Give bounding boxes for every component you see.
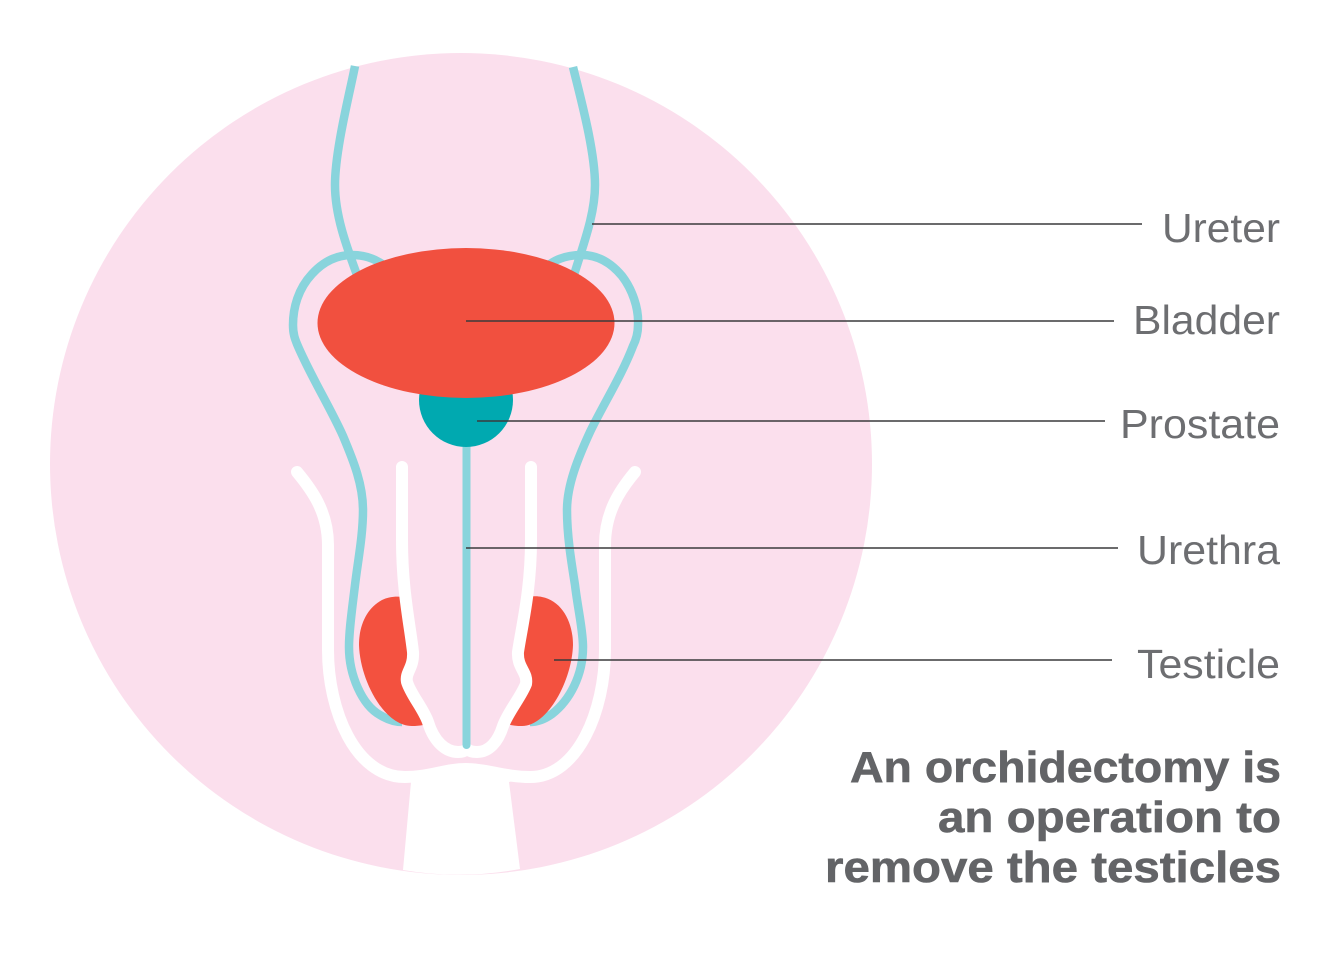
white inner lines	[402, 467, 531, 752]
ureters	[335, 66, 595, 275]
white lower body opening	[403, 764, 530, 875]
testicle right	[502, 596, 573, 726]
pink background circle	[50, 53, 872, 875]
caption: remove the testicles	[825, 843, 1281, 892]
labels: Urethra	[1137, 527, 1280, 573]
caption	[825, 743, 1281, 892]
labels: Testicle	[1137, 641, 1280, 687]
caption: an operation to	[938, 793, 1281, 842]
prostate	[419, 353, 513, 447]
urethra	[462, 440, 470, 745]
labels: Bladder	[1133, 297, 1280, 343]
testicle left	[359, 597, 432, 726]
labels: Ureter	[1162, 205, 1280, 251]
bladder	[318, 248, 614, 398]
labels	[1120, 205, 1280, 687]
vas deferens tubes	[293, 255, 638, 722]
white scrotum outline	[297, 472, 635, 777]
leader lines	[466, 224, 1142, 660]
caption: An orchidectomy is	[850, 743, 1281, 792]
labels: Prostate	[1120, 401, 1280, 447]
